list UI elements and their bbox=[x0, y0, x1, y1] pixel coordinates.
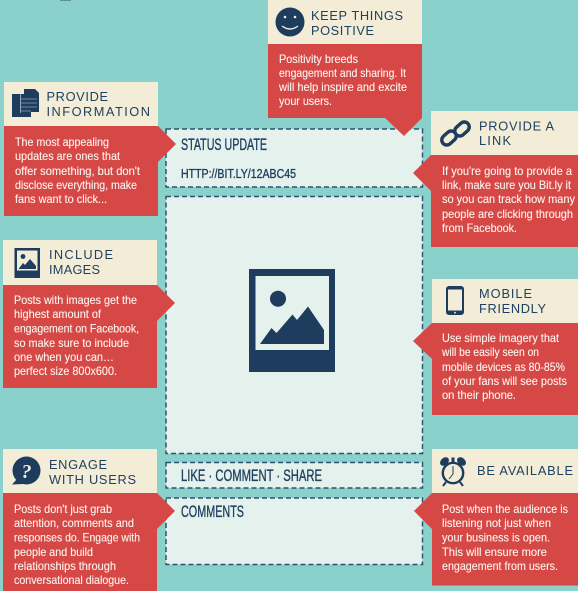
body text: provide information: updates are ones that bbox=[15, 149, 121, 163]
panel: be available bbox=[414, 449, 578, 586]
body text: provide information: disclose everything, make bbox=[15, 178, 137, 192]
body text: include images: so make sure to include bbox=[14, 336, 129, 350]
heading: keep things positive bbox=[311, 8, 403, 38]
body text: mobile friendly bbox=[441, 331, 567, 402]
body text: be available: engagement from users. bbox=[442, 559, 558, 573]
panel: provide a link bbox=[413, 111, 578, 247]
heading: include images bbox=[49, 247, 113, 277]
body text: provide information: offer something, but don't bbox=[15, 164, 141, 178]
heading: engage with users: WITH USERS bbox=[49, 472, 136, 487]
body text: mobile friendly: of your fans will see posts bbox=[442, 374, 567, 388]
panel: mobile friendly bbox=[413, 279, 578, 415]
heading: mobile friendly: FRIENDLY bbox=[479, 301, 546, 316]
body text: keep things positive: Positivity breeds bbox=[279, 52, 358, 66]
heading: include images: INCLUDE bbox=[49, 247, 113, 262]
like comment share text: LIKE · COMMENT · SHARE bbox=[181, 467, 322, 485]
body text: mobile friendly: Use simple imagery that bbox=[442, 331, 560, 345]
body text: provide a link: from Facebook. bbox=[442, 221, 517, 235]
heading: include images: IMAGES bbox=[49, 262, 100, 277]
heading: keep things positive: KEEP THINGS bbox=[311, 8, 403, 23]
heading: provide a link: LINK bbox=[479, 133, 511, 148]
body text: be available: Post when the audience is bbox=[442, 502, 568, 516]
body text: provide information bbox=[15, 135, 141, 206]
panel: engage with users bbox=[3, 449, 175, 591]
body text: be available: listening not just when bbox=[442, 516, 551, 530]
panel: status update box bbox=[166, 129, 422, 187]
icon: large picture placeholder bbox=[249, 269, 335, 372]
body text: engage with users bbox=[14, 502, 140, 587]
icon: small picture bbox=[14, 248, 40, 278]
heading: mobile friendly bbox=[479, 286, 546, 316]
panel: like comment share bar bbox=[166, 462, 422, 488]
heading: provide information: PROVIDE bbox=[46, 89, 108, 104]
body text: include images: engagement on Facebook, bbox=[14, 322, 139, 336]
icon: smiley face bbox=[276, 8, 304, 36]
body text: be available bbox=[442, 502, 568, 573]
heading: engage with users bbox=[49, 457, 136, 487]
body text: be available: This will ensure more bbox=[442, 545, 547, 559]
heading: provide a link bbox=[479, 118, 554, 148]
body text: include images: highest amount of bbox=[14, 307, 102, 321]
heading: provide information bbox=[46, 89, 150, 119]
icon: smartphone bbox=[446, 286, 464, 315]
body text: keep things positive: your users. bbox=[279, 94, 332, 108]
body text: engage with users: attention, comments and bbox=[14, 516, 134, 530]
icon: question speech bubble bbox=[12, 456, 40, 484]
body text: engage with users: conversational dialogue. bbox=[14, 573, 129, 587]
body text: engage with users: responses do. Engage with bbox=[14, 530, 140, 544]
heading: engage with users: ENGAGE bbox=[49, 457, 107, 472]
icon: documents bbox=[12, 89, 39, 117]
body text: keep things positive: will help inspire and excite bbox=[278, 80, 407, 94]
body text: include images: perfect size 800x600. bbox=[14, 364, 117, 378]
panel: comments box bbox=[166, 498, 422, 564]
panel: main image box bbox=[166, 196, 422, 454]
panel: provide information bbox=[4, 82, 176, 216]
body text: keep things positive bbox=[278, 52, 407, 108]
panel: include images bbox=[3, 240, 175, 388]
body text: include images: Posts with images get the bbox=[14, 293, 137, 307]
icon: chain link bbox=[440, 120, 471, 147]
body text: include images bbox=[14, 293, 139, 378]
body text: provide information: The most appealing bbox=[15, 135, 109, 149]
body text: include images: one when you can… bbox=[14, 350, 114, 364]
link placeholder text: HTTP://BIT.LY/12ABC45 bbox=[181, 166, 296, 181]
icon: question speech bubble: ? bbox=[22, 461, 32, 483]
icon: alarm clock bbox=[438, 456, 468, 486]
panel: keep things positive bbox=[268, 0, 422, 136]
body text: mobile friendly: will be easily seen on bbox=[441, 345, 539, 359]
body text: provide a link bbox=[442, 164, 575, 235]
status update heading: STATUS UPDATE bbox=[181, 136, 267, 154]
heading: provide information: INFORMATION bbox=[46, 104, 150, 119]
body text: keep things positive: engagement and sharing. It bbox=[279, 66, 407, 80]
body text: mobile friendly: mobile devices as 80-85% bbox=[442, 360, 565, 374]
body text: mobile friendly: on their phone. bbox=[442, 388, 516, 402]
heading: be available: BE AVAILABLE bbox=[477, 463, 573, 478]
body text: engage with users: people and build bbox=[14, 545, 93, 559]
heading: mobile friendly: MOBILE bbox=[479, 286, 532, 301]
heading: provide a link: PROVIDE A bbox=[479, 118, 554, 134]
body text: be available: your business is open. bbox=[442, 530, 550, 544]
body text: engage with users: relationships through bbox=[14, 559, 116, 573]
body text: provide information: fans want to click... bbox=[15, 192, 107, 206]
comments heading: COMMENTS bbox=[181, 503, 244, 521]
heading: keep things positive: POSITIVE bbox=[311, 23, 374, 38]
body text: engage with users: Posts don't just grab bbox=[14, 502, 112, 516]
